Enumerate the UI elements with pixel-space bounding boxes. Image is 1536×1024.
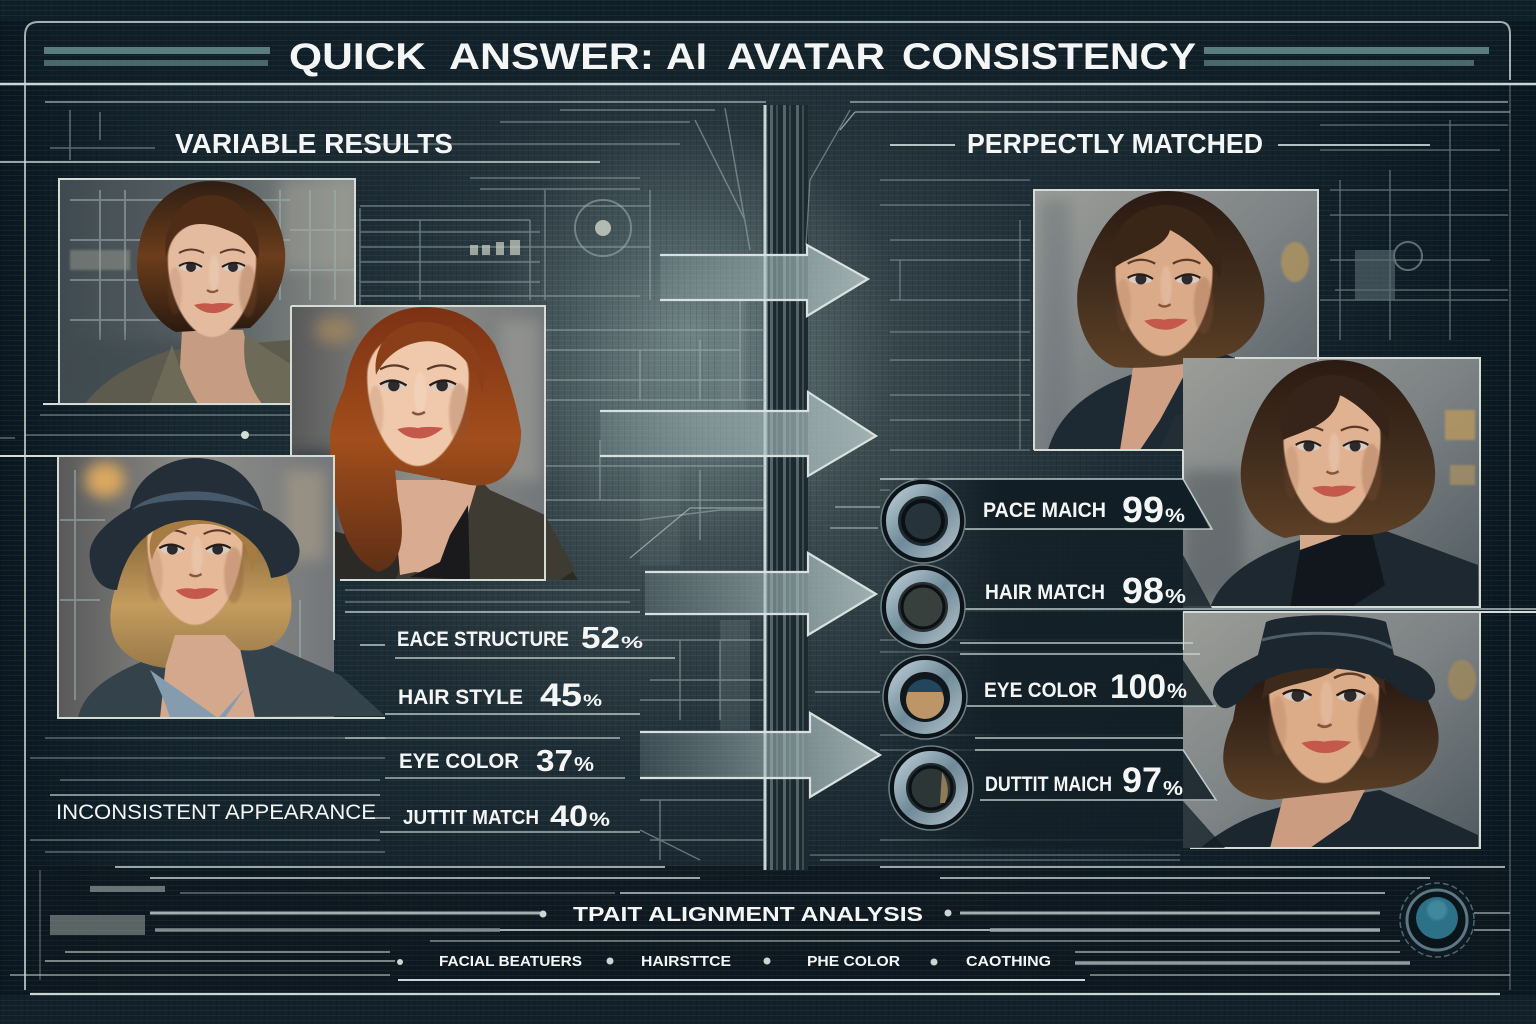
arrow 3: [645, 553, 876, 635]
portrait: hat and blond hair: [58, 456, 334, 718]
metric: eye color match: %: [1167, 680, 1187, 703]
metric: face structure: %: [621, 633, 643, 652]
portrait: hat bob hair bottom: [1183, 612, 1480, 848]
metric: hair match: [985, 570, 1186, 611]
portrait: short brown hair: [59, 179, 355, 404]
section heading: variable results: VARIABLE RESULTS: [175, 128, 453, 159]
metric: face structure: EACE STRUCTURE: [397, 628, 569, 651]
portrait jacket and hat overlay: [78, 458, 385, 718]
metric: eye color match: EYE COLOR: [984, 679, 1097, 702]
arrow 2: [600, 392, 876, 476]
metric: outfit match: %: [589, 810, 610, 831]
metric: outfit match: DUTTIT MAICH: [985, 773, 1112, 796]
metric: face match: %: [1165, 506, 1185, 527]
metrics: left panel: [50, 612, 675, 833]
portrait: bob hair top: [1034, 190, 1318, 450]
bottom heading: TPAIT ALIGNMENT ANALYSIS: [573, 904, 923, 926]
title: AI: [666, 36, 707, 77]
metric: eye color: %: [574, 754, 594, 776]
metric: eye color match: [984, 668, 1187, 706]
arrow 1: [660, 245, 868, 316]
metrics: right ribbons: [815, 479, 1536, 848]
arrow 4: [640, 713, 880, 797]
indicator ring: hair: [881, 565, 965, 649]
metric: hair match: HAIR MATCH: [985, 581, 1105, 604]
metric: outfit match: [403, 800, 610, 833]
metric: hair match: 98: [1122, 570, 1164, 611]
circuit line decoration, right: [806, 110, 1510, 860]
dark centre stripe column: [768, 105, 808, 870]
title: AVATAR: [727, 36, 885, 77]
caption: inconsistent appearance: INCONSISTENT APPEARANCE: [56, 801, 376, 824]
metric: face structure: [397, 620, 643, 655]
header bars: [44, 47, 1489, 66]
metric: hair style: HAIR STYLE: [398, 686, 523, 709]
portrait: bob hair middle: [1183, 358, 1480, 608]
trait legend: FACIAL BEATUERS: [439, 953, 582, 970]
metric: face match: 99: [1122, 489, 1164, 530]
title: ANSWER:: [449, 36, 654, 77]
indicator ring: face: [881, 479, 965, 563]
bottom analysis lines: [40, 867, 1505, 980]
metric: hair style: 45: [540, 677, 582, 713]
metric: outfit match: [985, 761, 1183, 800]
trait legend: HAIRSTTCE: [641, 953, 731, 970]
metric: hair style: [398, 677, 602, 713]
circuit line decoration, left: [30, 108, 765, 860]
metric: outfit match: JUTTIT MATCH: [403, 807, 539, 829]
metric: outfit match: %: [1163, 778, 1183, 800]
metric: eye color: 37: [536, 743, 573, 778]
title: CONSISTENCY: [902, 36, 1196, 77]
portrait: long red hair: [291, 306, 578, 580]
metric: face match: PACE MAICH: [983, 499, 1106, 522]
metric: outfit match: 97: [1122, 761, 1162, 800]
metric: hair match: %: [1165, 586, 1186, 608]
indicator ring: outfit: [889, 746, 973, 830]
indicator ring: eye color: [883, 655, 967, 739]
trait legend: PHE COLOR: [807, 953, 900, 970]
metrics: right labels: [983, 489, 1187, 800]
metric: face match: [983, 489, 1185, 530]
trait legend: [397, 953, 1051, 970]
metric: hair style: %: [583, 691, 602, 710]
teal orb icon: [1400, 883, 1510, 957]
metric: eye color match: 100: [1110, 668, 1166, 706]
metric: face structure: 52: [581, 620, 620, 655]
metric: outfit match: 40: [550, 800, 588, 833]
photo frames: [0, 179, 1536, 848]
metric: eye color: EYE COLOR: [399, 750, 519, 773]
trait legend: CAOTHING: [966, 953, 1051, 970]
metric: eye color: [399, 743, 594, 778]
title: [289, 36, 1196, 77]
title: QUICK: [289, 36, 426, 77]
section heading: perfectly matched: PERPECTLY MATCHED: [967, 128, 1263, 159]
